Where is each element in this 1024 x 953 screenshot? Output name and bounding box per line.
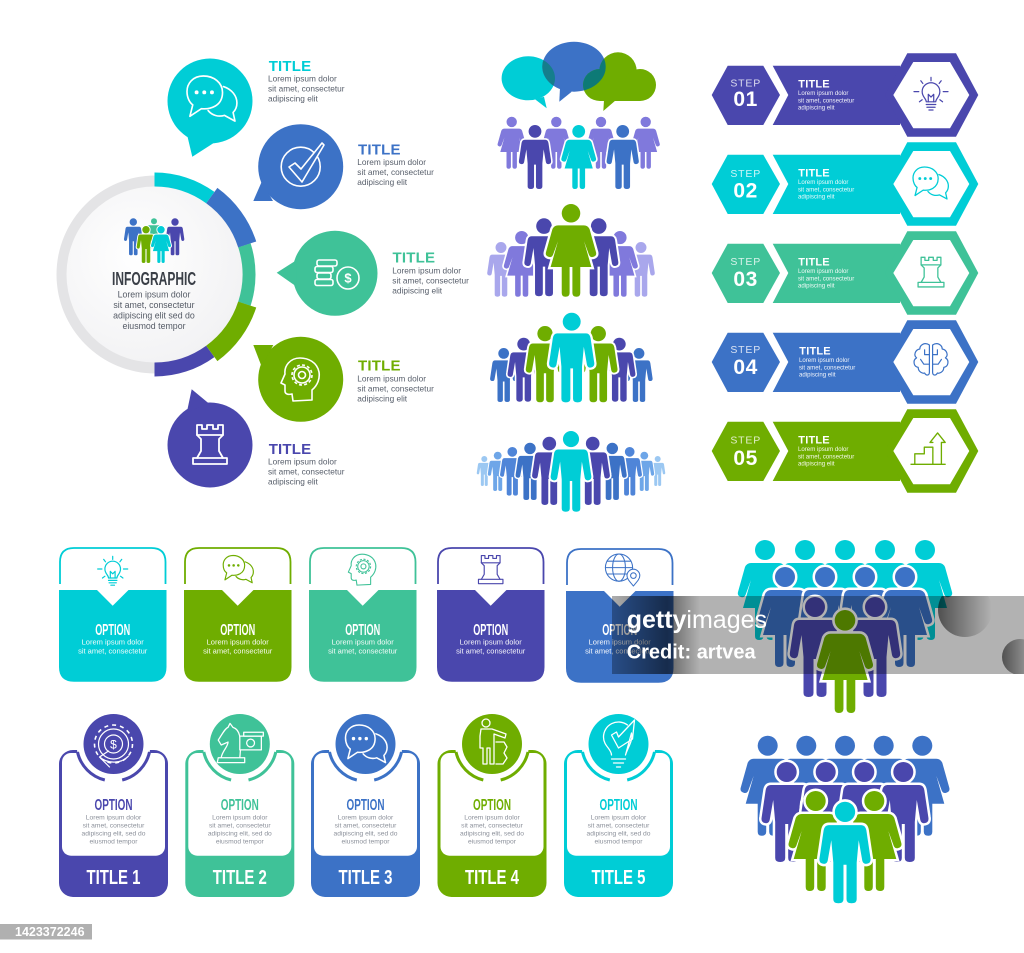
people group 1 — [498, 117, 660, 189]
step 03 — [712, 231, 978, 315]
option card 4: OPTION — [473, 622, 508, 639]
panel: title cards row — [59, 707, 673, 897]
title card 1: TITLE 1 — [86, 866, 140, 889]
text block 5 — [268, 441, 345, 486]
title card 5 — [564, 707, 673, 897]
step 05: sit amet, consectetur — [798, 453, 854, 460]
step 01: Lorem ipsum dolor — [798, 90, 848, 97]
bubble 3 teal with coins icon: $ — [344, 270, 352, 286]
option card 3: Lorem ipsum dolor — [332, 637, 394, 646]
text block 2: sit amet, consectetur — [357, 167, 434, 177]
step 05: TITLE — [798, 434, 830, 446]
text block 4: TITLE — [358, 358, 401, 375]
step 02: TITLE — [798, 167, 830, 179]
central circle with ring — [56, 176, 254, 374]
overlapping speech bubbles — [502, 42, 656, 111]
title card 4: Lorem ipsum dolor — [464, 814, 520, 821]
option card 5: sit amet, consectetur — [585, 646, 655, 655]
option card 3: sit amet, consectetur — [328, 646, 398, 655]
text block 1: sit amet, consectetur — [268, 84, 345, 94]
watermark band: gettyimages — [627, 606, 767, 634]
title card 4: TITLE 4 — [465, 866, 519, 889]
text block 3: TITLE — [392, 250, 435, 267]
centre heading and text: eiusmod tempor — [122, 321, 186, 331]
text block 3: sit amet, consectetur — [392, 275, 469, 285]
step 03: 03 — [733, 268, 758, 291]
option card 1: OPTION — [95, 622, 130, 639]
step 04: TITLE — [799, 345, 831, 357]
people group 2 — [487, 204, 655, 297]
text block 5: sit amet, consectetur — [268, 466, 345, 476]
title card 1: sit amet, consectetur — [83, 822, 145, 829]
stock id badge: 1423372246 — [15, 925, 85, 939]
option card 4: Lorem ipsum dolor — [460, 637, 522, 646]
step 03: sit amet, consectetur — [798, 275, 854, 282]
step 02: Lorem ipsum dolor — [798, 179, 848, 186]
option card 1 — [59, 548, 166, 682]
icon: team of people in centre — [124, 218, 184, 263]
option card 4: sit amet, consectetur — [456, 646, 526, 655]
text block 5: TITLE — [269, 441, 311, 458]
title card 2: OPTION — [221, 797, 259, 814]
option card 1: Lorem ipsum dolor — [82, 637, 144, 646]
step 01 — [712, 53, 978, 137]
step 05: Lorem ipsum dolor — [798, 446, 848, 453]
title card 1: $ — [110, 738, 117, 752]
text block 4 — [357, 358, 434, 404]
title card 5: TITLE 5 — [592, 866, 646, 889]
title card 4 — [438, 707, 546, 897]
option card 2: sit amet, consectetur — [203, 646, 273, 655]
text block 2 — [357, 141, 434, 187]
title card 5: adipiscing elit, sed do — [587, 830, 651, 837]
centre heading and text — [112, 269, 196, 331]
step 03: TITLE — [798, 256, 830, 268]
panel: circular infographic with five speech bubbles — [56, 58, 469, 488]
option card 5: Lorem ipsum dolor — [589, 637, 651, 646]
option card 3: OPTION — [345, 622, 380, 639]
text block 4: adipiscing elit — [357, 394, 408, 404]
title card 5: OPTION — [600, 797, 638, 814]
step 02 — [712, 142, 978, 226]
title card 1: eiusmod tempor — [90, 838, 138, 845]
title card 2: sit amet, consectetur — [209, 822, 271, 829]
crowd 2 — [740, 736, 950, 903]
title card 3: sit amet, consectetur — [335, 822, 397, 829]
centre heading and text: INFOGRAPHIC — [112, 269, 196, 289]
title card 3: TITLE 3 — [338, 866, 392, 889]
text block 5: Lorem ipsum dolor — [268, 456, 337, 466]
option card 2 — [184, 548, 292, 682]
option card 5: OPTION — [602, 622, 637, 639]
title card 3 — [311, 707, 420, 897]
panel: five steps — [712, 53, 978, 493]
title card 5: sit amet, consectetur — [588, 822, 650, 829]
text block 2: TITLE — [358, 141, 401, 158]
option card 1: sit amet, consectetur — [78, 646, 148, 655]
step 01: 01 — [733, 88, 758, 111]
text block 1: adipiscing elit — [268, 94, 319, 104]
step 03: Lorem ipsum dolor — [798, 268, 848, 275]
step 03: STEP — [730, 256, 761, 268]
step 02: sit amet, consectetur — [798, 186, 854, 193]
title card 3: Lorem ipsum dolor — [338, 814, 394, 821]
title card 4: sit amet, consectetur — [461, 822, 524, 829]
text block 3: Lorem ipsum dolor — [392, 265, 461, 275]
title card 2: adipiscing elit, sed do — [208, 830, 272, 837]
title card 1: Lorem ipsum dolor — [86, 814, 142, 821]
title card 2: TITLE 2 — [213, 866, 267, 889]
step 04: adipiscing elit — [799, 371, 836, 378]
text block 5: adipiscing elit — [268, 476, 319, 486]
title card 3: OPTION — [346, 797, 384, 814]
step 03: adipiscing elit — [798, 282, 835, 289]
option card 4 — [437, 548, 544, 682]
text block 2: adipiscing elit — [357, 177, 408, 187]
text block 4: Lorem ipsum dolor — [357, 374, 426, 384]
title card 3: adipiscing elit, sed do — [334, 830, 398, 837]
crowd 1 — [738, 540, 952, 713]
option card 5 — [566, 549, 674, 683]
bubble 3 teal with coins icon — [277, 231, 378, 316]
step 04: 04 — [733, 356, 758, 379]
watermark band: Credit: artvea — [627, 641, 757, 663]
step 01: adipiscing elit — [798, 104, 835, 111]
text block 3: adipiscing elit — [392, 285, 443, 295]
centre heading and text: adipiscing elit sed do — [113, 310, 195, 320]
people group 3 — [490, 313, 653, 402]
step 02: adipiscing elit — [798, 193, 835, 200]
step 05: adipiscing elit — [798, 460, 835, 467]
title card 1: OPTION — [94, 797, 132, 814]
stock id badge — [0, 924, 92, 940]
title card 5: Lorem ipsum dolor — [591, 814, 647, 821]
step 04: STEP — [730, 344, 761, 356]
panel: speech bubbles and people groups — [477, 42, 665, 512]
text block 2: Lorem ipsum dolor — [357, 157, 426, 167]
text block 1: TITLE — [269, 58, 311, 75]
title card 1: adipiscing elit, sed do — [82, 830, 146, 837]
step 04: sit amet, consectetur — [799, 364, 855, 371]
text block 3 — [392, 250, 469, 295]
step 05: STEP — [730, 434, 761, 446]
option card 2: Lorem ipsum dolor — [207, 637, 269, 646]
option card 2: OPTION — [220, 622, 255, 639]
panel: option cards row — [59, 548, 674, 683]
watermark band — [612, 596, 1024, 674]
step 01: STEP — [730, 78, 761, 90]
bubble 5 indigo with rook icon — [168, 389, 252, 488]
step 05 — [712, 409, 978, 493]
title card 5: eiusmod tempor — [595, 838, 643, 845]
step 04: Lorem ipsum dolor — [799, 357, 849, 364]
title card 1 — [59, 707, 168, 897]
title card 4: eiusmod tempor — [468, 838, 517, 845]
centre heading and text: Lorem ipsum dolor — [118, 289, 190, 299]
title card 4: adipiscing elit, sed do — [460, 830, 524, 837]
centre heading and text: sit amet, consectetur — [113, 300, 195, 310]
title card 4: OPTION — [473, 797, 511, 814]
step 02: STEP — [730, 168, 761, 180]
text block 1 — [268, 58, 345, 104]
step 02: 02 — [733, 179, 758, 202]
people group 4 — [477, 431, 665, 512]
title card 2 — [185, 707, 294, 897]
title card 2: eiusmod tempor — [216, 838, 265, 845]
option card 3 — [309, 548, 416, 682]
step 05: 05 — [733, 447, 758, 470]
step 04 — [712, 320, 978, 404]
step 01: sit amet, consectetur — [798, 97, 854, 104]
title card 2: Lorem ipsum dolor — [212, 814, 268, 821]
title card 3: eiusmod tempor — [342, 838, 390, 845]
bubble 2 blue with check icon — [253, 124, 343, 209]
bubble 4 green with head gear icon — [253, 337, 343, 422]
text block 4: sit amet, consectetur — [357, 384, 434, 394]
bubble 1 cyan with chat icon — [168, 58, 252, 157]
text block 1: Lorem ipsum dolor — [268, 74, 337, 84]
step 01: TITLE — [798, 78, 830, 90]
